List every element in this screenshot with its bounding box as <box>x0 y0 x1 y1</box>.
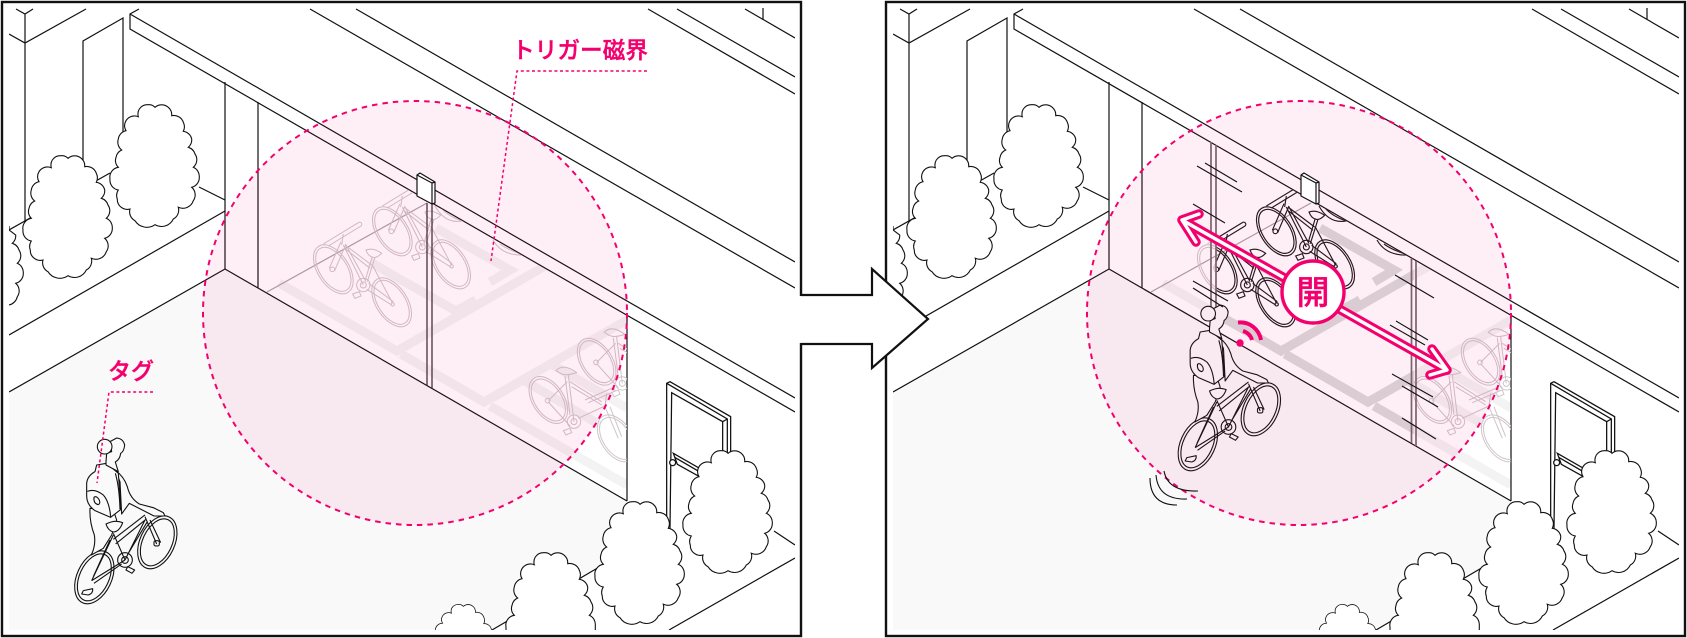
person walking bicycle with tag <box>67 438 185 610</box>
street scene: left <box>9 8 795 630</box>
bicycles seen through open door <box>1216 190 1406 328</box>
label: tag: タグ <box>108 358 154 384</box>
person walking bicycle at door <box>1170 305 1288 477</box>
magnetic field circle <box>1087 101 1511 525</box>
leader line: tag <box>97 392 153 483</box>
leader line: trigger field <box>491 71 647 261</box>
magnetic field circle <box>203 101 627 525</box>
closed sliding glass door <box>427 203 432 388</box>
panel: before, closed door <box>2 2 801 636</box>
open door leaves <box>1211 142 1416 446</box>
sensor box <box>417 173 435 204</box>
label: trigger magnetic field: トリガー磁界 <box>512 37 648 63</box>
arrow: step from left panel to right panel <box>799 269 928 368</box>
sensor box <box>1301 173 1319 204</box>
panel: after, open door <box>886 2 1685 636</box>
badge: open: 開 <box>1296 274 1330 311</box>
icon: tag signal waves <box>1236 322 1261 347</box>
icon: wheel motion arcs <box>1150 471 1198 505</box>
badge: open <box>1282 261 1344 323</box>
arrow: doors opening both ways <box>1182 214 1447 375</box>
street scene: right <box>893 8 1679 630</box>
motion lines: door sliding <box>1193 163 1438 439</box>
parking floor markings seen through open door <box>1224 224 1414 434</box>
